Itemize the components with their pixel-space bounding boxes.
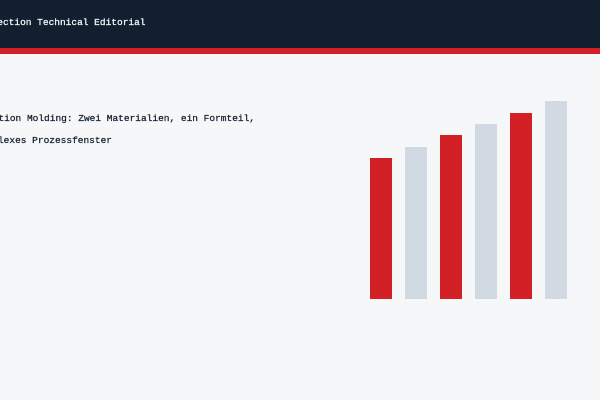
bar 3 xyxy=(440,135,462,299)
header band xyxy=(0,0,600,48)
red accent rule xyxy=(0,48,600,54)
bar 1 xyxy=(370,158,392,299)
bar 5 xyxy=(510,113,532,299)
bar 6 xyxy=(545,101,567,299)
bar 2 xyxy=(405,147,427,299)
bar 4 xyxy=(475,124,497,299)
